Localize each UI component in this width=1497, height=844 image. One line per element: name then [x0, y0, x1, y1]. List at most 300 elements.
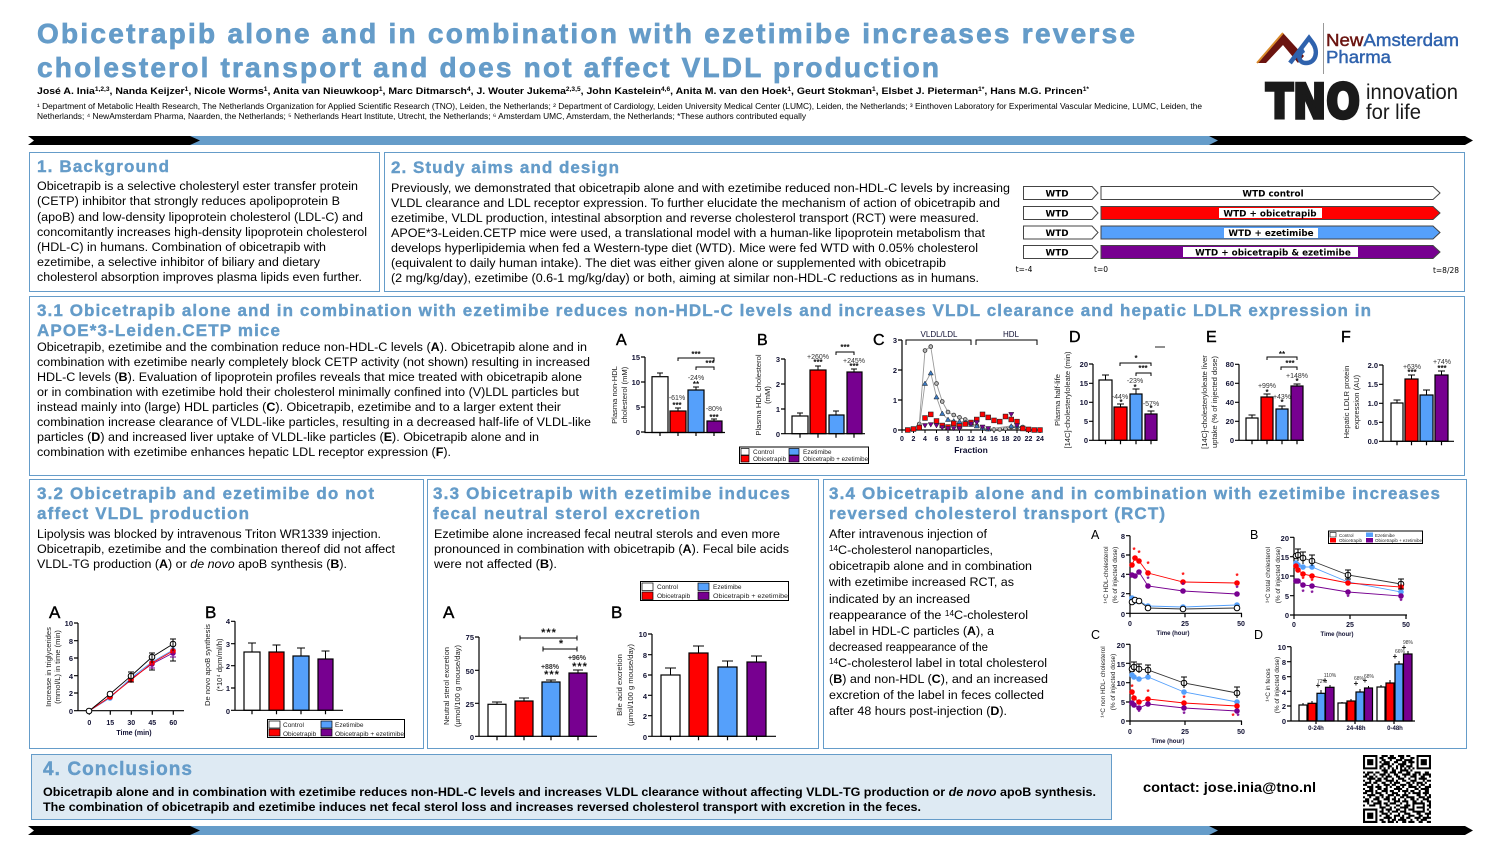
chart D: 14C in feces: +: [1393, 652, 1398, 661]
authors: José A. Inia: [37, 86, 89, 97]
authors: , John Kastelein: [581, 86, 661, 97]
chart A: triglyceride increase: [44, 603, 184, 737]
text: background: Obicetrapib is a selective cholesteryl ester transfer protein: [37, 179, 358, 193]
chart E: liver uptake: [1200, 329, 1308, 449]
chart C: lipoprotein profiles: 20: [1013, 436, 1021, 443]
chart A: neutral sterol excretion: 75: [466, 633, 474, 642]
chart D: 14C in feces: 8: [1282, 658, 1286, 667]
legend: 3.4: [1328, 531, 1422, 544]
chart B: plasma HDL cholesterol: (mM): [763, 386, 772, 404]
authors: 1*: [978, 87, 985, 93]
chart A: neutral sterol excretion: ***: [572, 661, 588, 673]
legend: 3.3: Ezetimibe: [713, 584, 742, 591]
contact: contact: jose.inia@tno.nl: [1143, 779, 1316, 795]
chart D: plasma half-life: [14C]-cholesteryloleate (min): [1063, 351, 1072, 449]
chart B: plasma HDL cholesterol: ***: [840, 343, 851, 352]
legend: 3.2: Control: [283, 722, 305, 729]
chart B: plasma HDL cholesterol: +260%: [807, 354, 829, 361]
chart B: 14C total cholesterol: 5: [1285, 592, 1289, 601]
chart D: 14C in feces: 0-24h: [1308, 726, 1324, 732]
chart A: 14C HDL-cholesterol: *: [1137, 549, 1141, 558]
text: study aims: (equivalent to daily human intake). The diet was either given alone or supplemented with obicetrapib: [391, 256, 946, 270]
chart C: lipoprotein profiles: 4: [923, 436, 927, 443]
chart E: liver uptake: *: [1280, 398, 1284, 407]
legend: 3.1: Ezetimibe: [803, 449, 832, 456]
chart E: liver uptake: *: [1265, 388, 1269, 397]
panel: 3.2 VLDL production: [30, 480, 424, 748]
text: 3.1: combination with ezetimibe nearly completely block CETP activity (not shown) resulting in increased: [37, 355, 590, 369]
text: 3.3: pronounced in combination with obicetrapib ( A). Fecal bile acids: [434, 542, 789, 556]
chart F: hepatic LDLR: 0.0: [1368, 437, 1378, 446]
text: 3.4: C-cholesterol nanoparticles,: [838, 543, 993, 557]
chart B: 14C total cholesterol: 0: [1285, 611, 1289, 620]
chart E: liver uptake: ***: [1285, 359, 1296, 368]
chart A: neutral sterol excretion: +88%: [541, 664, 560, 671]
legend: 3.3: Obicetrapib: [657, 593, 691, 600]
chart C: 14C non-HDL cholesterol: 0: [1128, 729, 1132, 736]
heading: 3.3: [433, 484, 790, 523]
authors: , Geurt Stokman: [791, 86, 872, 97]
icon: QR code: [1363, 755, 1431, 823]
diagram: study design timeline: t=8/28: [1433, 266, 1459, 275]
chart F: hepatic LDLR: Hepatic LDLR protein: [1342, 366, 1351, 438]
chart B: 14C total cholesterol: 20: [1281, 534, 1289, 543]
chart B: 14C total cholesterol: 25: [1346, 622, 1354, 629]
authors: , Nicole Worms: [188, 86, 264, 97]
heading: 3.4: 3.4 Obicetrapib alone and in combination with ezetimibe increases: [829, 484, 1440, 503]
chart E: liver uptake: uptake (% of injected dose): [1210, 356, 1219, 448]
logo: NewAmsterdam Pharma: [1257, 23, 1459, 74]
chart C: lipoprotein profiles: [873, 330, 1044, 455]
chart C: lipoprotein profiles: 10: [956, 436, 963, 443]
diagram: study design timeline: t=0: [1094, 265, 1108, 274]
chart A: plasma non-HDL cholesterol: -24%: [688, 375, 704, 382]
chart A: 14C HDL-cholesterol: 4: [1121, 571, 1126, 580]
chart A: 14C HDL-cholesterol: *: [1132, 546, 1136, 555]
text: background: concomitantly increases high-density lipoprotein cholesterol: [37, 225, 367, 239]
chart B: bile acid excretion: 8: [643, 651, 647, 660]
chart A: plasma non-HDL cholesterol: 5: [636, 403, 640, 412]
chart D: plasma half-life: *: [1149, 404, 1153, 413]
chart D: plasma half-life: 5: [1084, 417, 1088, 426]
chart D: 14C in feces: 24-48h: [1346, 726, 1366, 732]
chart D: 14C in feces: 2: [1282, 702, 1286, 711]
chart A: 14C HDL-cholesterol: [1091, 528, 1245, 637]
chart B: 14C total cholesterol: 50: [1402, 622, 1410, 629]
authors: 4,6: [661, 87, 671, 93]
heading: study aims: 2. Study aims and design: [391, 158, 619, 177]
chart C: 14C non-HDL cholesterol: 25: [1181, 729, 1189, 736]
heading: 3.1: APOE*3-Leiden.CETP mice: [37, 321, 280, 340]
chart F: hepatic LDLR: ***: [1437, 364, 1448, 373]
panel: study aims and design: [384, 152, 1464, 292]
chart D: plasma half-life: ***: [1138, 364, 1149, 373]
chart A: triglyceride increase: 4: [69, 672, 74, 681]
chart B: plasma HDL cholesterol: [754, 332, 865, 439]
chart C: lipoprotein profiles: 0: [900, 436, 904, 443]
chart C: lipoprotein profiles: HDL: [1003, 330, 1020, 339]
chart B: apoB synthesis: 2: [226, 662, 230, 671]
text: study aims: APOE*3-Leiden.CETP mice were used, a translational model with a human-like lipoprotein metabolism that: [391, 226, 986, 240]
title: cholesterol transport and does not affect VLDL production: [37, 52, 939, 83]
chart C: 14C non-HDL cholesterol: 10: [1117, 679, 1125, 688]
chart A: neutral sterol excretion: ***: [544, 669, 560, 681]
text: 3.1: or in combination with ezetimibe hold their cholesterol minimally confined into (V)LDL particles but: [37, 385, 580, 399]
heading: conclusions: 4. Conclusions: [43, 759, 192, 780]
chart A: 14C HDL-cholesterol: 25: [1181, 621, 1189, 628]
chart E: liver uptake: +99%: [1258, 383, 1276, 390]
chart D: 14C in feces: 66%: [1395, 649, 1406, 655]
chart A: 14C HDL-cholesterol: 0: [1128, 621, 1132, 628]
chart A: triglyceride increase: 0: [69, 707, 73, 716]
panel: background: [30, 152, 380, 292]
text: 3.1: combination increase clearance of VLDL-like particles, resulting in a decreased half-life of VLDL-like: [37, 415, 591, 429]
chart C: 14C non-HDL cholesterol: *: [1182, 694, 1186, 703]
chart A: neutral sterol excretion: Neutral sterol excretion: [442, 647, 451, 725]
text: 3.4: label in HDL-C particles (A), a: [829, 624, 994, 638]
chart C: 14C non-HDL cholesterol: 0: [1121, 717, 1125, 726]
chart C: 14C non-HDL cholesterol: *: [1146, 688, 1150, 697]
chart C: lipoprotein profiles: 3: [893, 336, 897, 345]
chart C: lipoprotein profiles: 12: [967, 436, 975, 443]
chart B: 14C total cholesterol: [1250, 528, 1410, 638]
chart D: 14C in feces: +: [1402, 643, 1407, 652]
panel: conclusions: [32, 754, 1112, 820]
text: 3.1: instead mainly into (large) HDL particles ( C). Obicetrapib, ezetimibe and to a larger extent their: [37, 400, 561, 414]
chart C: 14C non-HDL cholesterol: *: [1236, 712, 1240, 721]
chart C: 14C non-HDL cholesterol: *: [1231, 712, 1235, 721]
authors: 1,2,3: [95, 87, 110, 93]
chart B: 14C total cholesterol: *: [1301, 588, 1305, 597]
chart C: lipoprotein profiles: 14: [979, 436, 986, 443]
diagram: study design timeline: WTD: [1045, 210, 1069, 220]
chart A: triglyceride increase: 6: [69, 654, 73, 663]
chart D: plasma half-life: *: [1134, 354, 1138, 363]
heading: 3.2: affect VLDL production: [37, 504, 249, 523]
chart D: 14C in feces: 4: [1282, 688, 1287, 697]
chart C: 14C non-HDL cholesterol: C: [1091, 628, 1100, 642]
legend: 3.3: Obicetrapib + ezetimibe: [713, 593, 788, 600]
text: 3.4: After intravenous injection of: [829, 527, 988, 541]
chart A: neutral sterol excretion: A: [443, 603, 455, 622]
chart F: hepatic LDLR: 1.0: [1368, 399, 1378, 408]
chart F: hepatic LDLR: +63%: [1403, 364, 1421, 371]
text: 3.4: obicetrapib alone and in combination: [829, 559, 1032, 573]
chart B: apoB synthesis: 4: [226, 617, 231, 626]
chart A: plasma non-HDL cholesterol: -61%: [669, 395, 685, 402]
heading: 3.1: 3.1 Obicetrapib alone and in combination with ezetimibe reduces non-HDL-C levels and increases VLDL clearance and hepatic LDLR expression in: [37, 301, 1371, 320]
chart D: 14C in feces: (% of injected dose): [1274, 657, 1281, 713]
chart C: lipoprotein profiles: 2: [912, 436, 916, 443]
chart D: 14C in feces: 10: [1278, 643, 1286, 652]
chart A: 14C HDL-cholesterol: Time (hour): [1157, 631, 1189, 637]
diagram: study design timeline: WTD: [1045, 248, 1069, 258]
authors: , J. Wouter Jukema: [471, 86, 567, 97]
text: study aims: [391, 181, 1010, 285]
chart B: 14C total cholesterol: 10: [1281, 572, 1289, 581]
chart F: hepatic LDLR: 2.0: [1368, 361, 1378, 370]
chart B: 14C total cholesterol: *: [1346, 593, 1350, 602]
heading: 3.2: [37, 484, 374, 523]
chart C: lipoprotein profiles: Fraction: [954, 445, 988, 455]
chart D: plasma half-life: Plasma half-life: [1053, 374, 1062, 426]
chart D: 14C in feces: 110%: [1324, 673, 1337, 679]
chart B: 14C total cholesterol: *: [1399, 597, 1403, 606]
chart A: triglyceride increase: 60: [169, 720, 177, 727]
chart A: 14C HDL-cholesterol: 50: [1237, 621, 1245, 628]
text: 3.1: HDL-C levels (B). Evaluation of lipoprotein profiles reveals that mice treated with obicetrapib alone: [37, 370, 582, 384]
chart D: 14C in feces: 68%: [1364, 674, 1375, 680]
text: conclusions: The combination of obicetrapib and ezetimibe induces net fecal sterol loss and increases reversed cholesterol transport with excretion in the feces.: [43, 800, 921, 814]
text: 3.4: C-cholesterol: [954, 608, 1028, 622]
chart B: 14C total cholesterol: 0: [1292, 622, 1296, 629]
chart C: 14C non-HDL cholesterol: 20: [1117, 641, 1125, 650]
authors: 1: [379, 87, 383, 93]
chart C: 14C non-HDL cholesterol: *: [1130, 683, 1134, 692]
diagram: study design timeline: WTD + ezetimibe: [1228, 229, 1314, 239]
chart A: 14C HDL-cholesterol: *: [1235, 572, 1239, 581]
chart B: bile acid excretion: 0: [643, 733, 647, 742]
chart D: 14C in feces: ¹⁴C in feces: [1265, 668, 1272, 702]
chart A: neutral sterol excretion: 50: [466, 667, 474, 676]
chart A: plasma non-HDL cholesterol: A: [616, 332, 627, 349]
legend: 3.1: Control: [753, 449, 775, 456]
chart D: plasma half-life: -57%: [1143, 401, 1159, 408]
text: background: [37, 179, 367, 284]
diagram: study design timeline: [1016, 186, 1459, 275]
legend: 3.2: [268, 720, 404, 738]
text: 3.2: [37, 527, 396, 571]
chart D: 14C in feces: +: [1323, 676, 1328, 685]
chart A: neutral sterol excretion: 0: [470, 733, 474, 742]
logo: NewAmsterdam Pharma: Pharma: [1326, 47, 1391, 67]
legend: 3.4: Obicetrapib + ezetimibe: [1375, 538, 1422, 543]
chart A: neutral sterol excretion: +96%: [568, 655, 587, 662]
text: 3.2: VLDL-TG production (A) or de novo apoB synthesis (B).: [37, 557, 347, 571]
chart A: neutral sterol excretion: [442, 603, 597, 742]
chart B: apoB synthesis: 1: [226, 684, 230, 693]
text: 3.2: Lipolysis was blocked by intravenous Triton WR1339 injection.: [37, 527, 381, 541]
heading: 3.4: reversed cholesterol transport (RCT): [829, 504, 1165, 523]
chart B: 14C total cholesterol: *: [1310, 577, 1314, 586]
text: 3.4: 14: [945, 609, 955, 618]
logo: TNO innovation for life: [1266, 75, 1458, 130]
chart B: bile acid excretion: B: [611, 603, 622, 622]
chart A: neutral sterol excretion: 25: [466, 700, 474, 709]
chart F: hepatic LDLR: 0.5: [1368, 418, 1378, 427]
authors: 1: [264, 87, 268, 93]
chart A: neutral sterol excretion: (µmol/100 g mouse/day): [453, 645, 462, 727]
authors: 1*: [1083, 87, 1090, 93]
chart D: 14C in feces: 68%: [1354, 676, 1365, 682]
authors: 1: [185, 87, 189, 93]
chart B: 14C total cholesterol: B: [1250, 528, 1258, 542]
chart A: 14C HDL-cholesterol: ¹⁴C HDL-cholesterol: [1103, 546, 1110, 604]
text: 3.4: decreased reappearance of the: [829, 640, 988, 654]
text: 3.1: Obicetrapib, ezetimibe and the combination reduce non-HDL-C levels ( A). Obicetrapib alone and in: [37, 340, 587, 354]
affiliations: ¹ Department of Metabolic Health Research, The Netherlands Organization for Applied Scientific Research (TNO), Leiden, the Netherlands; ² Department of Cardiology, Leiden University Medical Center (LUMC), Leiden, the Netherlands; ³ Einthoven Laboratory for Experimental Vascular Medicine, LUMC, Leiden, the: [37, 102, 1202, 111]
chart D: 14C in feces: D: [1254, 628, 1263, 642]
heading: background: 1. Background: [37, 157, 169, 176]
legend: 3.2: Ezetimibe: [335, 722, 364, 729]
chart A: plasma non-HDL cholesterol: -80%: [706, 406, 722, 413]
legend: 3.1: [740, 447, 868, 464]
chart B: 14C total cholesterol: *: [1301, 575, 1305, 584]
panel: 3.4 reversed cholesterol transport: [824, 480, 1466, 748]
chart B: 14C total cholesterol: *: [1310, 589, 1314, 598]
chart E: liver uptake: 60: [1226, 379, 1234, 388]
chart F: hepatic LDLR: ***: [1407, 368, 1418, 377]
chart C: lipoprotein profiles: 6: [935, 436, 939, 443]
chart A: 14C HDL-cholesterol: 0: [1121, 610, 1125, 619]
chart D: 14C in feces: 72%: [1317, 679, 1328, 685]
chart B: plasma HDL cholesterol: Plasma HDL cholesterol: [754, 354, 763, 436]
text: 3.4: 14: [829, 544, 839, 553]
authors: 2,3,5: [566, 87, 581, 93]
chart D: 14C in feces: 0-48h: [1387, 726, 1403, 732]
chart A: triglyceride increase: 30: [127, 720, 135, 727]
text: 3.4: [828, 527, 1048, 718]
authors: 1: [872, 87, 876, 93]
text: 3.1: combination with ezetimibe enhances hepatic LDL receptor expression ( F).: [37, 445, 451, 459]
text: background: (CETP) inhibitor that strongly reduces apolipoprotein B: [37, 194, 340, 208]
chart C: lipoprotein profiles: C: [873, 332, 885, 349]
chart B: 14C total cholesterol: (% of injected dose): [1275, 547, 1282, 603]
chart B: plasma HDL cholesterol: 2: [776, 380, 780, 389]
chart B: plasma HDL cholesterol: +245%: [843, 358, 865, 365]
chart C: 14C non-HDL cholesterol: (% of injected dose): [1110, 654, 1117, 710]
authors: , Hans M.G. Princen: [984, 86, 1083, 97]
authors: , Elsbet J. Pieterman: [876, 86, 978, 97]
panel: 3.3 fecal neutral sterol excretion: [428, 480, 818, 748]
chart D: 14C in feces: +: [1316, 681, 1321, 690]
text: 3.4: (B) and non-HDL (C), and an increased: [829, 672, 1048, 686]
chart C: lipoprotein profiles: VLDL/LDL: [921, 330, 958, 339]
affiliations: Netherlands; ⁴ NewAmsterdam Pharma, Naarden, the Netherlands; ⁵ Netherlands Heart Institute, Utrecht, the Netherlands; ⁶ Amsterdam UMC, Amsterdam, the Netherlands; *These authors contributed equally: [37, 112, 807, 121]
chart A: 14C HDL-cholesterol: A: [1091, 528, 1100, 542]
arrow: header ribbon: [28, 136, 1473, 145]
text: conclusions: Obicetrapib alone and in combination with ezetimibe reduces non-HDL-C levels and increases VLDL clearance without affecting VLDL-TG production or de novo apoB synthesis.: [43, 785, 1096, 799]
chart C: lipoprotein profiles: 8: [946, 436, 950, 443]
chart C: 14C non-HDL cholesterol: Time (hour): [1152, 739, 1184, 745]
logo: NewAmsterdam Pharma: NewAmsterdam: [1326, 30, 1459, 50]
chart A: 14C HDL-cholesterol: 6: [1121, 551, 1125, 560]
chart B: apoB synthesis: B: [205, 603, 216, 622]
chart B: bile acid excretion: (µmol/100 g mouse/day): [626, 644, 635, 726]
chart F: hepatic LDLR: expression (AU): [1352, 374, 1361, 429]
chart F: hepatic LDLR: +74%: [1433, 359, 1451, 366]
chart A: 14C HDL-cholesterol: *: [1181, 571, 1185, 580]
arrow: footer ribbon: [28, 826, 1473, 835]
text: study aims: Previously, we demonstrated that obicetrapib alone and with ezetimibe reduced non-HDL-C levels by increasing: [391, 181, 1010, 195]
chart D: plasma half-life: 0: [1084, 436, 1088, 445]
chart A: triglyceride increase: 15: [106, 720, 114, 727]
diagram: study design timeline: WTD: [1045, 229, 1069, 239]
chart A: 14C HDL-cholesterol: *: [1181, 581, 1185, 590]
chart A: plasma non-HDL cholesterol: 0: [636, 428, 640, 437]
chart E: liver uptake: 40: [1226, 398, 1234, 407]
chart A: 14C HDL-cholesterol: (% of injected dose): [1112, 547, 1119, 603]
chart B: bile acid excretion: Bile acid excretion: [615, 654, 624, 716]
title: Obicetrapib alone and in combination with ezetimibe increases reverse: [37, 18, 1135, 49]
chart C: 14C non-HDL cholesterol: 5: [1121, 698, 1125, 707]
chart E: liver uptake: E: [1206, 329, 1217, 346]
legend: 3.4: Control: [1339, 533, 1354, 538]
chart B: apoB synthesis: (*10⁴ dpm/ml/h): [215, 638, 224, 692]
diagram: study design timeline: WTD: [1045, 190, 1069, 200]
chart B: plasma HDL cholesterol: 3: [776, 355, 780, 364]
chart A: triglyceride increase: Increase in triglycerides: [44, 627, 53, 707]
chart B: 14C total cholesterol: 15: [1281, 553, 1289, 562]
chart A: triglyceride increase: 45: [148, 720, 156, 727]
chart D: plasma half-life: *: [1133, 383, 1137, 392]
chart D: 14C in feces: 6: [1282, 673, 1286, 682]
legend: 3.4: Obicetrapib: [1339, 538, 1363, 543]
chart E: liver uptake: **: [1279, 350, 1286, 359]
chart A: plasma non-HDL cholesterol: 10: [632, 378, 640, 387]
authors: , Anita M. van den Hoek: [670, 86, 788, 97]
chart A: 14C HDL-cholesterol: *: [1146, 560, 1150, 569]
text: 3.3: [433, 527, 789, 571]
text: conclusions: [43, 785, 1096, 814]
chart E: liver uptake: +43%: [1273, 394, 1291, 401]
diagram: study design timeline: t=-4: [1016, 265, 1033, 274]
chart D: 14C in feces: 98%: [1403, 640, 1414, 646]
chart A: triglyceride increase: Time (min): [116, 730, 152, 737]
chart B: plasma HDL cholesterol: 0: [776, 430, 780, 439]
chart B: apoB synthesis: 0: [226, 707, 230, 716]
text: study aims: ezetimibe, VLDL production, intestinal absorption and reverse cholesterol transport (RCT) were measured.: [391, 211, 979, 225]
chart A: triglyceride increase: A: [49, 603, 61, 622]
chart A: triglyceride increase: 0: [87, 720, 91, 727]
chart E: liver uptake: [14C]-cholesteryloleate liver: [1200, 355, 1209, 449]
legend: 3.2: Obicetrapib + ezetimibe: [335, 731, 404, 738]
chart E: liver uptake: *: [1295, 377, 1299, 386]
chart C: 14C non-HDL cholesterol: *: [1182, 710, 1186, 719]
chart C: lipoprotein profiles: 0: [893, 426, 897, 435]
chart A: plasma non-HDL cholesterol: Plasma non-HDL: [610, 366, 619, 424]
chart D: plasma half-life: *: [1119, 398, 1123, 407]
logo: TNO innovation for life: for life: [1366, 101, 1421, 124]
logo: TNO innovation for life: innovation: [1366, 81, 1458, 104]
diagram: study design timeline: WTD + obicetrapib & ezetimibe: [1195, 248, 1351, 258]
chart D: plasma half-life: -44%: [1112, 394, 1128, 401]
chart D: plasma half-life: D: [1069, 329, 1081, 346]
chart C: 14C non-HDL cholesterol: 50: [1237, 729, 1245, 736]
chart C: 14C non-HDL cholesterol: [1091, 628, 1245, 745]
heading: 3.3: 3.3 Obicetrapib with ezetimibe induces: [433, 484, 790, 503]
chart A: neutral sterol excretion: *: [559, 638, 564, 650]
text: 3.1: particles (D) and increased liver uptake of VLDL-like particles ( E). Obicetrapib alone and in: [37, 430, 539, 444]
chart C: lipoprotein profiles: 22: [1025, 436, 1032, 443]
chart D: plasma half-life: 10: [1080, 398, 1088, 407]
text: 3.4: after 48 hours post-injection (D).: [829, 704, 1007, 718]
legend: 3.3: Control: [657, 584, 679, 591]
text: 3.4: reappearance of the: [829, 608, 939, 622]
text: 3.4: 14: [829, 657, 839, 666]
text: study aims: VLDL clearance and LDL receptor expression. To further elucidate the mechanism of action of obicetrapib and: [391, 196, 1000, 210]
chart A: triglyceride increase: 8: [69, 637, 73, 646]
chart C: lipoprotein profiles: 1: [893, 396, 897, 405]
chart E: liver uptake: 0: [1230, 436, 1234, 445]
chart A: 14C HDL-cholesterol: *: [1146, 575, 1150, 584]
chart B: plasma HDL cholesterol: B: [757, 332, 768, 349]
chart D: plasma half-life: -23%: [1127, 378, 1143, 385]
chart B: bile acid excretion: 4: [643, 692, 648, 701]
chart C: lipoprotein profiles: 16: [990, 436, 998, 443]
authors: 1: [787, 87, 792, 93]
chart B: plasma HDL cholesterol: ***: [849, 362, 860, 371]
